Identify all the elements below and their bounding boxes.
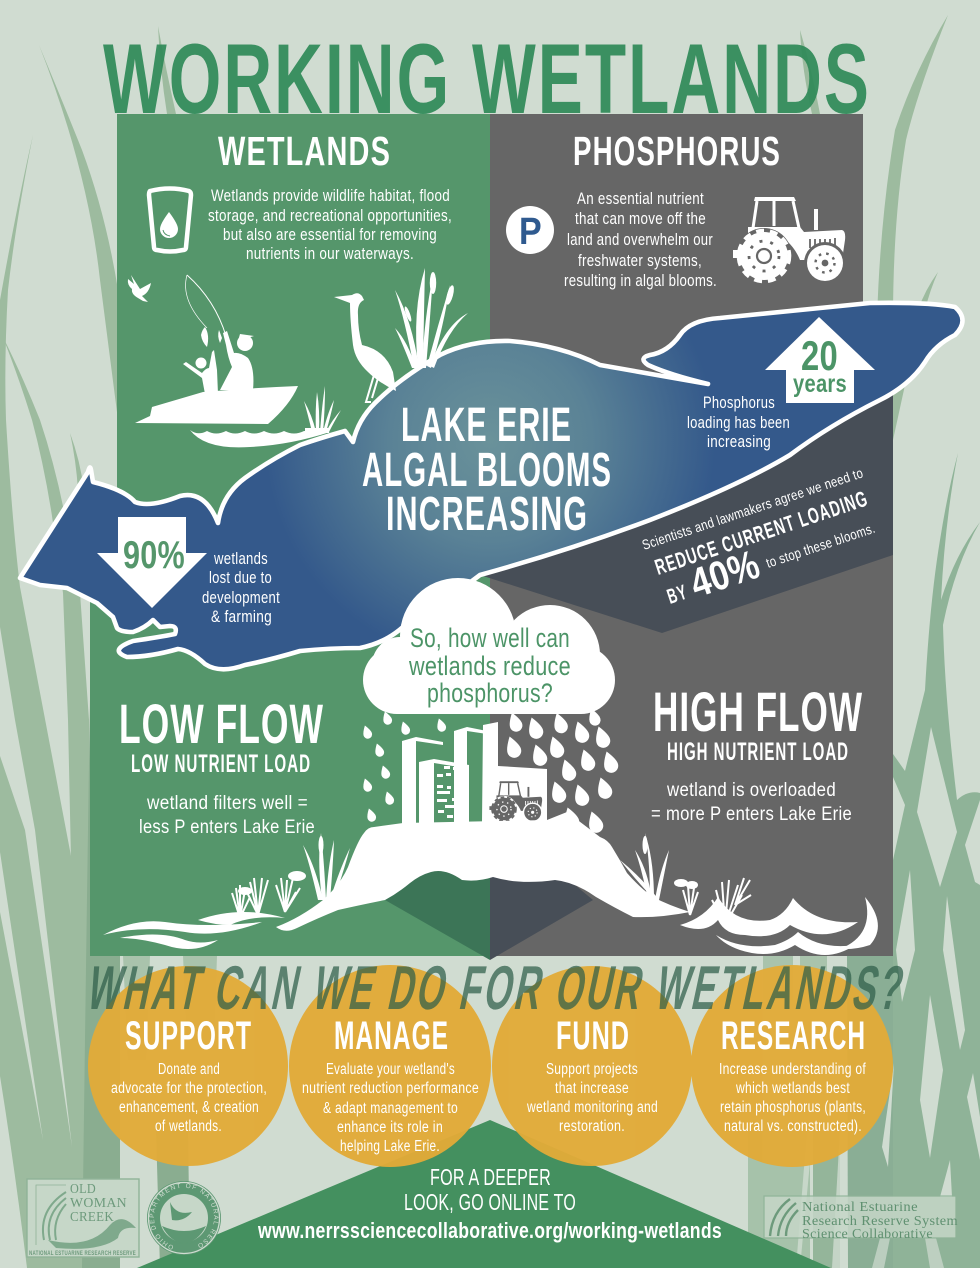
- panel: wetlands green background: [90, 114, 490, 956]
- callout: 90 percent wetlands lost: [97, 517, 280, 626]
- logo: old woman creek: [27, 1179, 139, 1257]
- action: support: enhancement, & creation: [119, 1099, 259, 1116]
- raindrops: [361, 707, 620, 835]
- action: fund: Support projects: [546, 1061, 638, 1078]
- text: wetlands description: storage, and recreational opportunities,: [208, 207, 452, 225]
- action: fund: that increase: [555, 1080, 629, 1097]
- panel text: low flow: LOW NUTRIENT LOAD: [131, 750, 311, 778]
- action: manage: [302, 1014, 479, 1155]
- illustration: right water waves: [680, 897, 878, 955]
- text: wetlands description: nutrients in our waterways.: [246, 245, 414, 263]
- panel text: high flow: = more P enters Lake Erie: [651, 803, 852, 825]
- action: support: of wetlands.: [155, 1118, 222, 1135]
- action: research: RESEARCH: [721, 1014, 866, 1058]
- illustration: left water waves: [103, 912, 285, 949]
- action: support: SUPPORT: [125, 1014, 252, 1058]
- icon: duck: [128, 275, 151, 302]
- callout: 20 years phosphorus increasing: loading has been: [687, 414, 790, 432]
- logo: old woman creek: OLD: [70, 1182, 96, 1197]
- text: phosphorus description: land and overwhelm our: [567, 231, 713, 249]
- panel text: high flow: [651, 680, 863, 825]
- callout: reduce loading by 40 percent: 40%: [684, 541, 765, 607]
- call to action text: FOR A DEEPER: [430, 1164, 551, 1190]
- illustration: heron: [334, 293, 396, 402]
- illustration: right wetland reeds: [620, 833, 698, 900]
- callout: 90 percent wetlands lost: 90%: [123, 534, 185, 577]
- icon: glass of water: [149, 188, 191, 252]
- callout: 20 years phosphorus increasing: 20: [801, 332, 838, 379]
- icon: phosphorus P: P: [519, 211, 542, 253]
- mound of land: [276, 812, 690, 931]
- city buildings: [402, 722, 547, 824]
- call to action text: [257, 1164, 722, 1243]
- callout: reduce loading by 40 percent: Scientists and lawmakers agree we need to: [640, 464, 865, 553]
- action: research: Increase understanding of: [719, 1061, 866, 1078]
- panel text: low flow: less P enters Lake Erie: [139, 816, 315, 838]
- action: fund: [526, 1014, 658, 1135]
- logo: old woman creek: WOMAN: [70, 1196, 127, 1211]
- logo: national estuarine research reserve system science collaborative: [764, 1196, 958, 1242]
- panel text: high flow: wetland is overloaded: [666, 779, 836, 801]
- action: fund: wetland monitoring and: [526, 1099, 658, 1116]
- panel text: low flow: wetland filters well =: [146, 792, 308, 814]
- action: manage: nutrient reduction performance: [302, 1080, 479, 1097]
- panel text: low flow: LOW FLOW: [119, 692, 324, 755]
- callout: 90 percent wetlands lost: development: [202, 589, 280, 607]
- illustration: water under boat: [190, 430, 330, 447]
- action: support: [111, 1014, 267, 1135]
- lake erie shape: [20, 303, 962, 669]
- logo: ohio department of natural resources seal: OHIO DEPARTMENT OF NATURAL RESOURCES: [150, 1184, 218, 1250]
- callout: 20 years phosphorus increasing: [687, 317, 875, 451]
- heading: phosphorus: PHOSPHORUS: [573, 128, 781, 174]
- lake heading: INCREASING: [386, 488, 588, 541]
- action: manage: & adapt management to: [323, 1100, 458, 1117]
- call to action text: www.nerrssciencecollaborative.org/working-wetlands: [257, 1218, 722, 1243]
- lake heading: [362, 399, 612, 541]
- callout: 90 percent wetlands lost: lost due to: [209, 569, 272, 587]
- logo: national estuarine research reserve system science collaborative: Research Reserve System: [802, 1214, 958, 1229]
- action: fund: restoration.: [559, 1118, 625, 1135]
- logo: national estuarine research reserve system science collaborative: Science Collaborative: [802, 1227, 933, 1242]
- call to action text: LOOK, GO ONLINE TO: [404, 1189, 576, 1215]
- action: manage: enhance its role in: [337, 1119, 443, 1136]
- lake heading: LAKE ERIE: [401, 399, 572, 452]
- illustration: left grass tufts: [232, 878, 300, 918]
- action: research: which wetlands best: [735, 1080, 850, 1097]
- text: phosphorus description: resulting in algal blooms.: [564, 272, 717, 290]
- callout: reduce loading by 40 percent: BY: [664, 581, 691, 609]
- callout: 90 percent wetlands lost: wetlands: [213, 550, 268, 568]
- icon: tractor: [733, 197, 846, 284]
- cloud with question: phosphorus?: [427, 678, 553, 708]
- action: research: retain phosphorus (plants,: [720, 1099, 866, 1116]
- cloud with question: wetlands reduce: [408, 651, 571, 681]
- cloud with question: So, how well can: [410, 623, 570, 653]
- text: phosphorus description: that can move off the: [575, 210, 706, 228]
- logo: old woman creek: NATIONAL ESTUARINE RESEARCH RESERVE: [29, 1250, 136, 1257]
- action: manage: Evaluate your wetland's: [326, 1061, 455, 1078]
- logo: national estuarine research reserve system science collaborative: National Estuarine: [802, 1200, 918, 1215]
- callout: 20 years phosphorus increasing: Phosphorus: [703, 394, 775, 412]
- illustration: cattail reeds: [395, 268, 468, 368]
- text: wetlands description: Wetlands provide wildlife habitat, flood: [211, 187, 450, 205]
- action: research: [719, 1014, 866, 1135]
- callout: 90 percent wetlands lost: & farming: [211, 608, 272, 626]
- action: fund: FUND: [556, 1014, 630, 1058]
- dark wedge behind reduction message: [480, 390, 893, 633]
- icon: phosphorus P: [506, 206, 554, 254]
- callout: 20 years phosphorus increasing: years: [793, 370, 847, 398]
- action: support: Donate and: [158, 1061, 220, 1078]
- illustration: right grass tufts: [683, 878, 751, 925]
- cloud with question: [363, 578, 615, 714]
- icon: small tractor: [489, 781, 543, 822]
- logo: old woman creek: CREEK: [70, 1210, 114, 1225]
- action: research: natural vs. constructed).: [724, 1118, 862, 1135]
- lake heading: ALGAL BLOOMS: [362, 444, 612, 497]
- dark chevron under the mound: [385, 860, 593, 960]
- action: support: advocate for the protection,: [111, 1080, 267, 1097]
- panel text: high flow: HIGH FLOW: [653, 680, 863, 743]
- heading: wetlands: WETLANDS: [218, 128, 391, 174]
- logo: ohio department of natural resources seal: [147, 1181, 221, 1255]
- text: wetlands description: but also are essential for removing: [223, 226, 437, 244]
- action: manage: helping Lake Erie.: [340, 1138, 440, 1155]
- illustration: family fishing in boat: [135, 275, 298, 424]
- callout: 20 years phosphorus increasing: increasing: [707, 433, 771, 451]
- action: manage: MANAGE: [334, 1014, 449, 1058]
- panel text: low flow: [119, 692, 324, 838]
- panel: phosphorus gray background: [490, 114, 893, 956]
- text: wetlands description: [208, 187, 452, 263]
- illustration: left wetland reeds: [238, 833, 357, 900]
- action circles: [88, 965, 893, 1167]
- callout: reduce loading by 40 percent: to stop these blooms.: [764, 520, 877, 571]
- text: phosphorus description: An essential nutrient: [577, 190, 704, 208]
- illustration: small reeds: [304, 386, 341, 433]
- text: phosphorus description: [564, 190, 717, 290]
- callout: reduce loading by 40 percent: [640, 464, 877, 609]
- green triangle footer: [137, 1120, 831, 1268]
- text: phosphorus description: freshwater systems,: [578, 252, 702, 270]
- panel text: high flow: HIGH NUTRIENT LOAD: [667, 738, 849, 766]
